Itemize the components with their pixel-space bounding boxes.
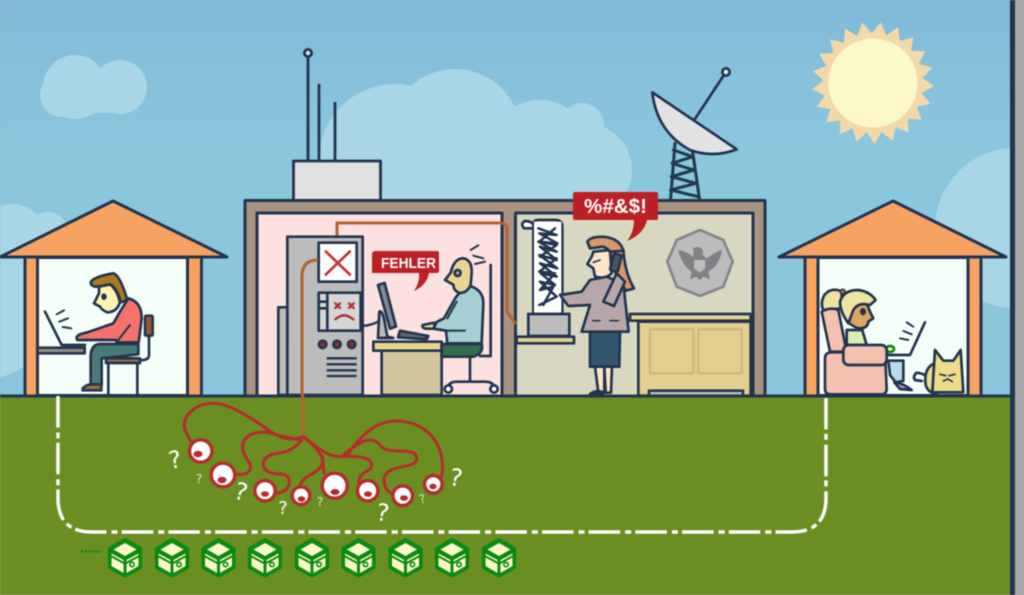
- cloud: right edge: [935, 148, 1024, 308]
- eyeball 3: [255, 480, 275, 501]
- man at laptop: [37, 273, 153, 395]
- eyeball 2: [211, 463, 235, 487]
- question marks: ?: [231, 477, 251, 507]
- eyeball 8: [424, 476, 442, 493]
- sun: [812, 22, 934, 144]
- woman on phone: [560, 237, 634, 395]
- cloud: behind left house: [0, 204, 68, 380]
- room: left, pink: [257, 213, 502, 396]
- vent lines: [327, 358, 357, 376]
- row of green cubes: [110, 540, 514, 576]
- question marks: ?: [447, 463, 465, 493]
- control knobs: [319, 341, 355, 348]
- right edge frame: [1010, 0, 1024, 595]
- desk: [373, 342, 442, 395]
- desk, computer and worker: [363, 245, 498, 395]
- question marks: ?: [166, 445, 184, 475]
- main building: [245, 200, 765, 396]
- worker: [422, 245, 485, 357]
- woman in armchair with laptop: [822, 289, 925, 394]
- question marks: ?: [417, 491, 427, 507]
- question marks: ?: [196, 472, 202, 486]
- green dotted trail: [81, 550, 101, 553]
- error window with red X: [319, 243, 357, 282]
- orange cable across rooms: [337, 223, 516, 324]
- speech bubble: swearing: [573, 192, 658, 241]
- server machine: [278, 237, 363, 395]
- ground line: [0, 394, 1012, 398]
- sad screen: [319, 293, 361, 331]
- cloud: behind the main building: [319, 69, 632, 236]
- printer with scribbled paper: [517, 220, 574, 343]
- left house: [0, 201, 227, 396]
- orange cable into ground: [302, 260, 318, 400]
- presidential seal: [667, 230, 733, 296]
- rooftop antennas and box: [294, 49, 380, 201]
- question marks: ?: [278, 498, 288, 519]
- cabinet: [630, 314, 751, 397]
- eyeball 6: [358, 480, 378, 501]
- monitor: [378, 283, 396, 338]
- keyboard: [398, 331, 428, 339]
- room: right, beige: [516, 213, 753, 396]
- eyeballs: [190, 440, 442, 506]
- desk and laptop: [37, 310, 85, 353]
- eyeball 1: [190, 440, 212, 462]
- eyeball 4: [292, 487, 310, 505]
- satellite dish and tower: [652, 68, 737, 198]
- sleeping cat: [914, 350, 963, 394]
- sky background: [0, 0, 1012, 396]
- eyeball 5: [322, 473, 347, 498]
- chair: [106, 316, 153, 395]
- question marks: ?: [375, 498, 391, 528]
- speech bubble: FEHLER: [372, 251, 439, 291]
- right house: [779, 201, 1006, 396]
- white dash-dot network line: [58, 396, 826, 532]
- speech bubble: FEHLER: FEHLER: [381, 255, 436, 272]
- red cable tree: [184, 395, 443, 494]
- question marks: [166, 445, 465, 528]
- question marks: ?: [317, 495, 323, 509]
- ground: [0, 396, 1012, 595]
- cloud: upper left: [40, 55, 147, 119]
- eyeball 7: [393, 486, 413, 506]
- office chair: [445, 265, 498, 393]
- speech bubble: swearing: %#&$!: [584, 196, 647, 218]
